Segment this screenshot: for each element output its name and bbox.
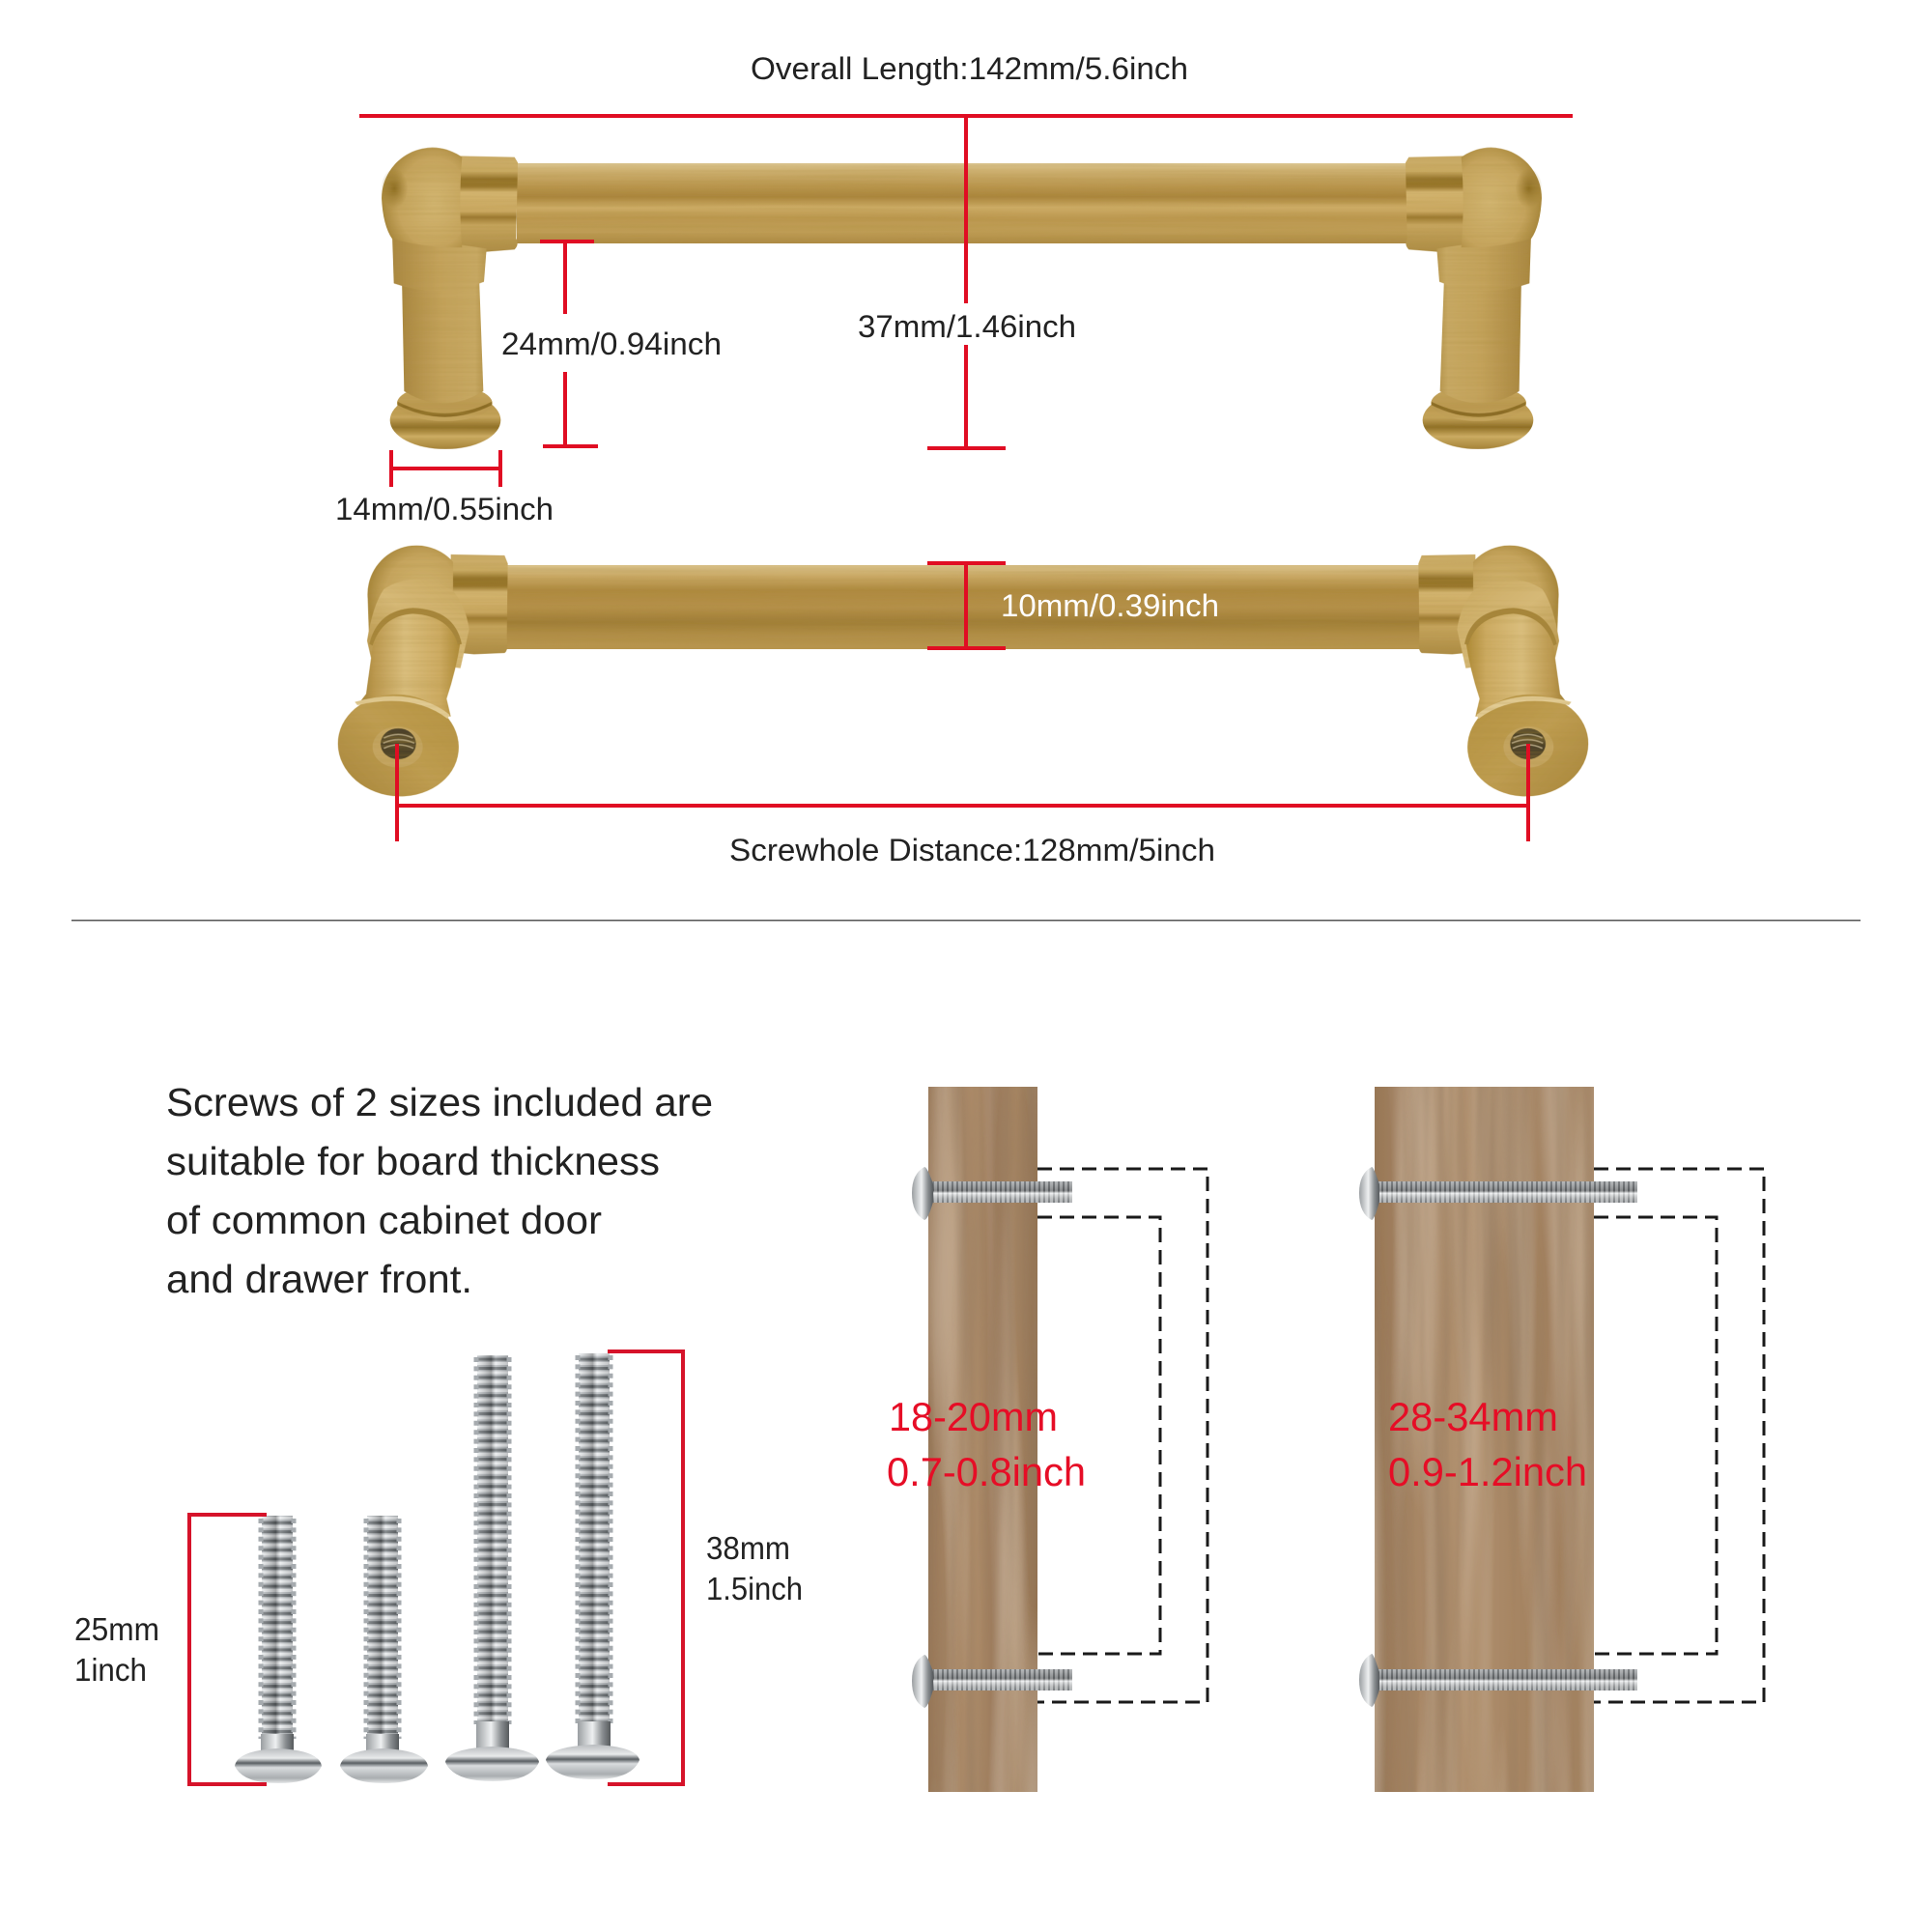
label: 25mm: 1inch <box>74 1652 147 1688</box>
label: thick board range: 28-34mm <box>1388 1394 1558 1439</box>
screw: thick board top <box>1359 1167 1637 1220</box>
label: thin board range: 0.7-0.8inch <box>887 1449 1086 1494</box>
text block: screw description: and drawer front. <box>166 1257 472 1301</box>
panel: thick board <box>1359 1087 1764 1792</box>
text block: screw description: suitable for board thickness <box>166 1139 660 1183</box>
screw: thin board top <box>912 1167 1072 1220</box>
dimension: clearance 24mm <box>501 242 722 446</box>
panel: thin board <box>887 1087 1208 1792</box>
screw: thin board bottom <box>912 1655 1072 1708</box>
label: thin board range: 18-20mm <box>889 1394 1058 1439</box>
handle bar: side view <box>517 163 1415 243</box>
screw: 25mm second <box>340 1516 428 1783</box>
wood board: 18-20mm <box>928 1087 1037 1792</box>
label: 25mm: 25mm <box>74 1611 159 1647</box>
dashed handle outline: thick board <box>1594 1169 1764 1702</box>
label: 38mm: 38mm <box>706 1530 790 1566</box>
bracket: 25mm length <box>74 1515 267 1784</box>
text block: screw description <box>166 1080 713 1301</box>
handle end: left elbow and post <box>381 148 518 449</box>
label: thin board range <box>887 1394 1086 1494</box>
label: 38mm <box>706 1530 803 1606</box>
label: thick board range: 0.9-1.2inch <box>1388 1449 1587 1494</box>
screw: 25mm first <box>235 1516 322 1783</box>
dimension: screwhole distance <box>397 744 1528 867</box>
handle: back view <box>333 546 1593 803</box>
dimension: base width 14mm <box>335 450 554 526</box>
dimension: overall length: Overall Length:142mm/5.6inch <box>751 51 1188 86</box>
handle: side view <box>381 148 1543 449</box>
dimension: screwhole distance: Screwhole Distance:128mm/5inch <box>729 833 1215 867</box>
handle bar: back view <box>504 565 1428 649</box>
handle end: right with screw hole <box>1418 546 1593 803</box>
bracket: 38mm length <box>608 1351 803 1784</box>
text block: screw description: Screws of 2 sizes included are <box>166 1080 713 1124</box>
text block: screw description: of common cabinet door <box>166 1198 602 1242</box>
wood board: 28-34mm <box>1375 1087 1594 1792</box>
dashed handle outline: thin board <box>1037 1169 1208 1702</box>
dimension: total height 37mm: 37mm/1.46inch <box>858 309 1076 344</box>
screw: 38mm second <box>546 1353 639 1779</box>
dimension: total height 37mm <box>858 116 1076 448</box>
screw: thick board bottom <box>1359 1654 1637 1707</box>
handle end: right elbow and post <box>1406 148 1543 449</box>
dimension: clearance 24mm: 24mm/0.94inch <box>501 327 722 361</box>
label: 25mm <box>74 1611 159 1688</box>
label: 38mm: 1.5inch <box>706 1571 803 1606</box>
screw: 38mm first <box>445 1355 539 1781</box>
dimension: overall length <box>359 51 1573 118</box>
dimension: bar diameter 10mm: 10mm/0.39inch <box>1001 588 1219 623</box>
dimension: base width 14mm: 14mm/0.55inch <box>335 492 554 526</box>
handle end: left with screw hole <box>333 546 508 803</box>
label: thick board range <box>1388 1394 1587 1494</box>
dimension: bar diameter 10mm <box>927 563 1219 648</box>
